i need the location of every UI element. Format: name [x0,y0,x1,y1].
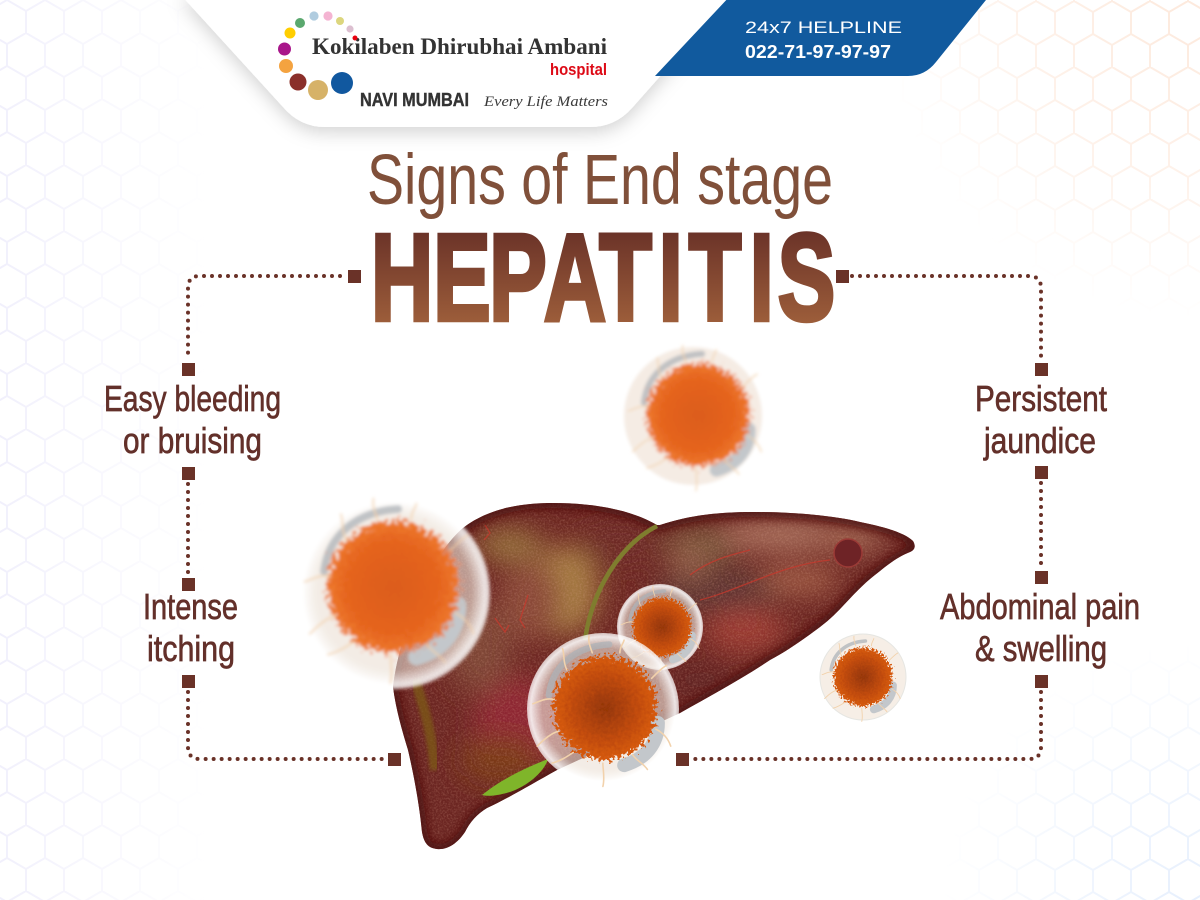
symptom: easy bleeding: Easy bleeding [104,378,281,419]
symptom: intense itching: itching [147,628,235,669]
bubble: small right [820,634,906,721]
connector: left middle [182,467,195,591]
symptom: persistent jaundice: jaundice [983,420,1096,461]
helpline number: 022-71-97-97-97 [745,42,891,62]
logo: tagline: Every Life Matters [483,94,608,110]
title line: Signs of End stage [367,141,833,220]
connector: bottom right [676,675,1048,766]
symptom: abdominal pain [940,586,1140,669]
bubble: large blurred left [298,497,490,689]
symptom: abdominal pain: & swelling [975,628,1107,669]
title: HEPATITIS: HEPATITIS [371,210,835,347]
symptom: intense itching [143,586,238,669]
liver: lower ligament [415,680,435,770]
symptom: easy bleeding: or bruising [123,420,262,461]
bubble: small centre [617,584,703,671]
logo: red dot [352,36,358,40]
symptom: abdominal pain: Abdominal pain [940,586,1140,627]
symptom: persistent jaundice: Persistent [975,378,1107,419]
liver illustration [380,495,925,860]
liver: cyst [834,539,862,567]
logo panel [180,0,733,127]
logo: location: NAVI MUMBAI [360,90,469,110]
logo: hospital name: Kokilaben Dhirubhai Ambani [312,34,608,59]
helpline banner [655,0,990,76]
bubble: large centre [527,633,679,786]
liver: gallbladder [482,759,548,796]
liver: veins [484,525,830,632]
logo: hospital word: hospital [550,60,607,79]
connector: bottom left [182,675,401,766]
connector: right middle [1035,466,1048,584]
liver: edge shading [393,503,915,849]
connector: top right [836,270,1048,376]
symptom: intense itching: Intense [143,586,238,627]
connector: top left [182,270,361,376]
symptom: easy bleeding [104,378,281,461]
logo: dot ring [278,11,354,100]
bubble: top blurred [624,346,762,490]
helpline label: 24x7 HELPLINE [745,18,902,37]
liver: falciform ligament [585,526,657,640]
symptom: persistent jaundice [975,378,1107,461]
